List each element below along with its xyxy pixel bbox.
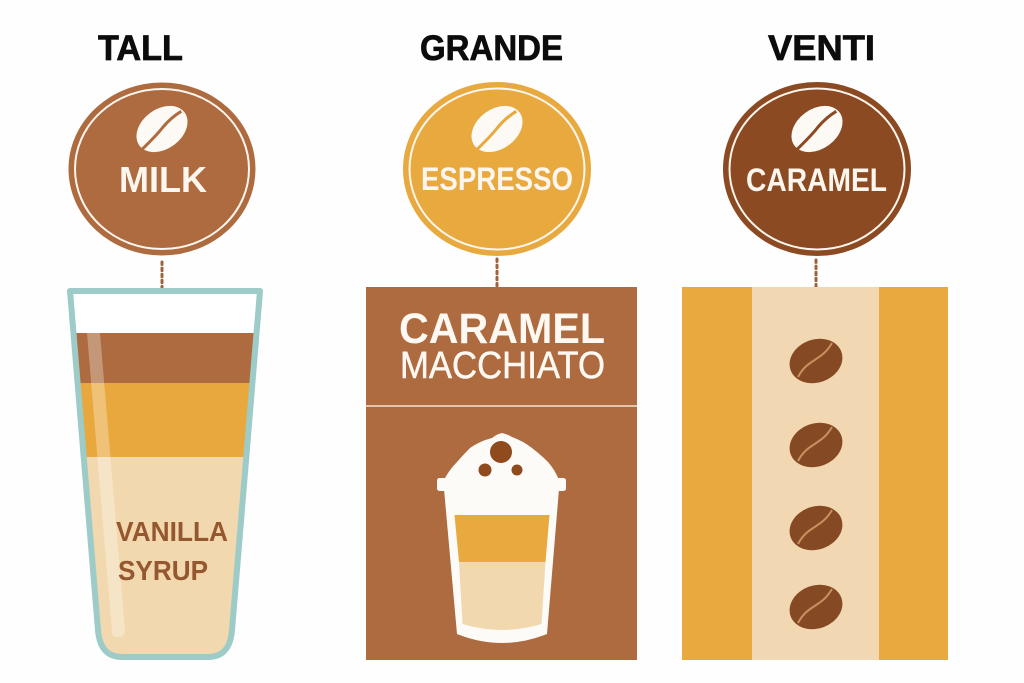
panel: striped beans	[682, 287, 948, 660]
connector: dotted line	[814, 260, 818, 289]
heading: venti: VENTI	[768, 29, 875, 68]
icon: coffee bean	[126, 96, 196, 163]
icon: coffee bean	[461, 96, 531, 163]
column: tall	[60, 29, 270, 662]
column: grande	[366, 29, 637, 660]
toppings	[478, 441, 522, 476]
title: caramel macchiato: MACCHIATO	[400, 345, 605, 387]
icon: bean 3	[783, 499, 849, 557]
label: milk: MILK	[119, 159, 207, 200]
title: caramel macchiato	[399, 305, 605, 387]
column: venti	[682, 29, 948, 660]
heading: tall: TALL	[98, 29, 183, 68]
infographic: coffee sizes	[67, 34, 948, 660]
panel: caramel macchiato	[366, 287, 637, 660]
heading: grande: GRANDE	[420, 29, 563, 68]
icon: bean 1	[783, 332, 849, 390]
label: caramel: CARAMEL	[746, 162, 887, 198]
icon: iced drink cup	[437, 433, 566, 643]
icon: bean 2	[783, 416, 849, 474]
title: caramel macchiato: CARAMEL	[399, 305, 605, 353]
glass: layered drink	[60, 291, 270, 662]
icon: bean 4	[783, 578, 849, 636]
label: vanilla syrup: SYRUP	[118, 555, 208, 586]
connector: dotted line	[160, 262, 164, 290]
glass highlight	[87, 333, 125, 637]
badge: caramel	[723, 82, 911, 256]
label: espresso: ESPRESSO	[421, 161, 573, 197]
badge: espresso	[403, 82, 591, 256]
badge: milk	[68, 82, 256, 256]
label: vanilla syrup	[116, 516, 228, 586]
label: vanilla syrup: VANILLA	[116, 516, 228, 547]
connector: dotted line	[496, 259, 498, 286]
icon: coffee bean	[781, 96, 851, 163]
